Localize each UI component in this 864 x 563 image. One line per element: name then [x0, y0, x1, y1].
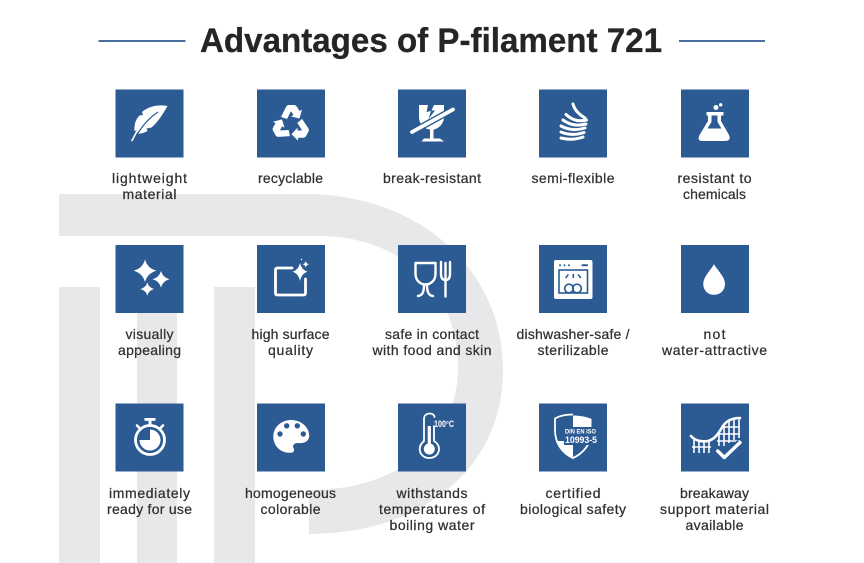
- item: breakaway support material available: breakaway: [680, 485, 749, 501]
- item: homogeneous colorable: homogeneous: [245, 485, 336, 501]
- item: withstands temperatures of boiling water: [379, 404, 485, 533]
- item: resistant to chemicals: resistant to: [678, 170, 752, 186]
- item: not water-attractive: not: [704, 326, 726, 342]
- icon: sparkles: [134, 260, 170, 296]
- item: recyclable: recyclable: [258, 170, 323, 186]
- item: dishwasher-safe / sterilizable: sterilizable: [538, 342, 609, 358]
- item: resistant to chemicals: [678, 90, 752, 202]
- item: safe in contact with food and skin: with food and skin: [372, 342, 492, 358]
- icon: palette: [273, 420, 309, 453]
- item: not water-attractive: [661, 245, 767, 358]
- item: withstands temperatures of boiling water: withstands: [396, 485, 468, 501]
- icon: dishwasher: [554, 260, 592, 299]
- icon: safety shield: 10993-5: [565, 435, 597, 445]
- item: immediately ready for use: immediately: [109, 485, 190, 501]
- item: immediately ready for use: [107, 404, 192, 517]
- background logo watermark: [59, 194, 503, 563]
- item: safe in contact with food and skin: [372, 245, 492, 358]
- item: certified biological safety: biological safety: [520, 501, 626, 517]
- item: dishwasher-safe / sterilizable: dishwasher-safe /: [516, 326, 630, 342]
- icon: water drop: [703, 264, 725, 295]
- item: visually appealing: appealing: [118, 342, 181, 358]
- icon: glass and fork: [416, 262, 450, 296]
- item: visually appealing: [116, 245, 184, 358]
- item: homogeneous colorable: colorable: [260, 501, 321, 517]
- item: break-resistant: [383, 90, 481, 186]
- item: semi-flexible: semi-flexible: [532, 170, 615, 186]
- item: resistant to chemicals: chemicals: [683, 186, 746, 202]
- icon: glossy surface: [276, 259, 309, 295]
- item: safe in contact with food and skin: safe in contact: [385, 326, 479, 342]
- item: dishwasher-safe / sterilizable: [516, 245, 630, 358]
- icon: support structure with check mark: [691, 418, 740, 458]
- item: high surface quality: quality: [268, 342, 313, 358]
- item: certified biological safety: certified: [546, 485, 600, 501]
- icon: recycle arrows: [269, 105, 312, 143]
- item: not water-attractive: water-attractive: [661, 342, 767, 358]
- icon: broken glass crossed out: [412, 105, 453, 142]
- item: withstands temperatures of boiling water: boiling water: [390, 517, 475, 533]
- icon: stopwatch: [136, 418, 164, 454]
- icon: safety shield: DIN EN ISO: [565, 428, 596, 436]
- item: high surface quality: high surface: [252, 326, 330, 342]
- icon: flexible coil: [561, 104, 586, 139]
- item: recyclable: [257, 90, 325, 186]
- icon: flask: [699, 103, 730, 141]
- item: break-resistant: break-resistant: [383, 170, 481, 186]
- item: breakaway support material available: support material: [660, 501, 769, 517]
- icon: thermometer 100°C: 100°C: [434, 419, 454, 429]
- title: Advantages of P-filament 721: [200, 22, 662, 60]
- item: visually appealing: visually: [126, 326, 174, 342]
- item: immediately ready for use: ready for use: [107, 501, 192, 517]
- item: breakaway support material available: [660, 404, 769, 533]
- item: breakaway support material available: available: [686, 517, 744, 533]
- icon: safety shield: [555, 414, 598, 458]
- item: lightweight material: lightweight: [112, 170, 187, 186]
- item: high surface quality: [252, 245, 330, 358]
- item: semi-flexible: [532, 90, 615, 186]
- item: withstands temperatures of boiling water: temperatures of: [379, 501, 485, 517]
- icon: feather: [132, 105, 168, 140]
- item: certified biological safety: [520, 404, 626, 517]
- item: homogeneous colorable: [245, 404, 336, 517]
- item: lightweight material: material: [122, 186, 176, 202]
- item: lightweight material: [112, 90, 187, 202]
